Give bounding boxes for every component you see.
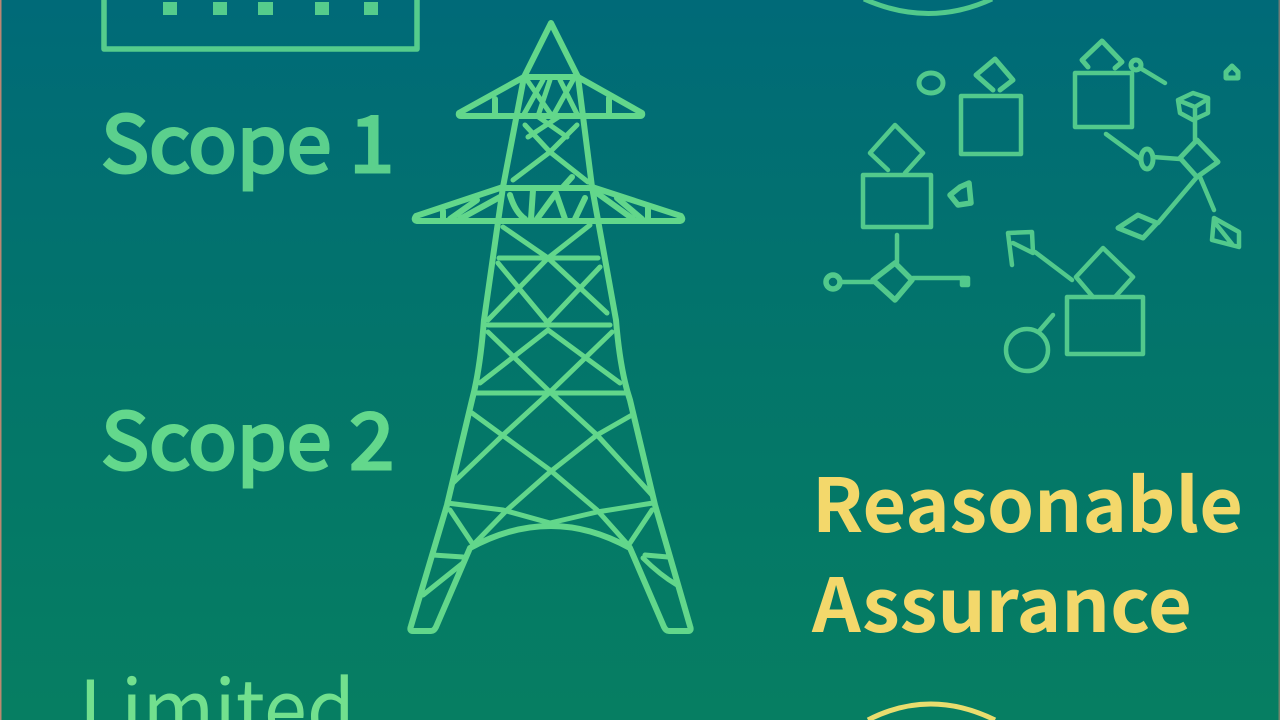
tower body outline and feet (410, 77, 691, 631)
network box group top centre (919, 59, 1021, 205)
heading: Reasonable Assurance: Reasonable (812, 447, 1243, 554)
network box group bottom (1006, 232, 1143, 371)
network box group left (826, 125, 968, 300)
icon: transmission tower (410, 23, 691, 631)
heading: Scope 2: Scope 2 (101, 380, 394, 492)
icon: green gauge arc at top (864, 0, 992, 14)
heading: Scope 1: Scope 1 (101, 83, 394, 195)
tower lattice bracing (423, 80, 677, 595)
network hub right (1106, 93, 1239, 247)
tower lower arm (415, 177, 682, 221)
icon: yellow gauge arc at bottom (868, 704, 995, 720)
heading: Reasonable Assurance (811, 447, 1243, 654)
network box group top right (1075, 41, 1238, 127)
heading: Reasonable Assurance: Assurance (811, 547, 1192, 654)
tower peak and upper arm (459, 23, 642, 116)
icon: network of boxes and nodes (826, 41, 1239, 371)
icon: building outline with windows (104, 0, 417, 49)
